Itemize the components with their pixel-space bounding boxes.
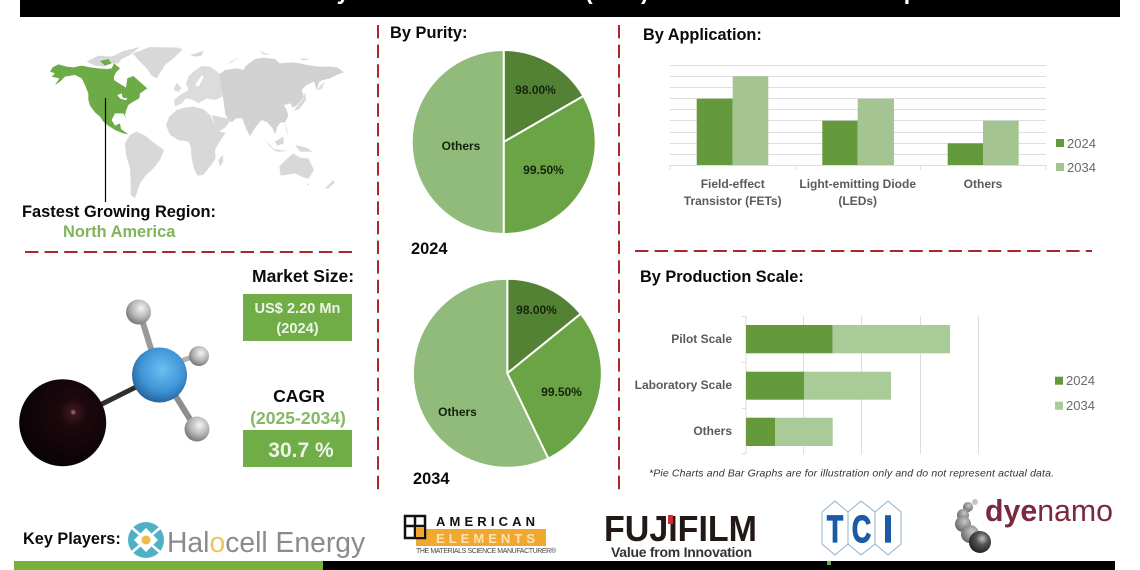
- market size value box: (2024): [276, 321, 319, 337]
- bar chart: production scale: 2034: [1066, 398, 1095, 413]
- heading: fastest growing region: Fastest Growing Region:: [22, 203, 216, 221]
- panel: by production scale: [635, 268, 1095, 480]
- logo: TCI: [822, 501, 901, 555]
- bar chart: production scale: Pilot Scale: [671, 332, 732, 346]
- bar chart: application: Field-effect: [701, 177, 765, 191]
- pie chart 2024: Others: [442, 139, 481, 153]
- panel dividers: [25, 25, 1092, 491]
- panel: molecule: [19, 300, 210, 466]
- pie chart 2034: 98.00%: [516, 303, 557, 317]
- logo: TCI: T: [827, 507, 843, 550]
- heading: CAGR: CAGR: [273, 386, 325, 406]
- icon: hydrogen atom right: [189, 346, 209, 366]
- footer bar: [14, 561, 1115, 570]
- logo: Fujifilm: Value from Innovation: [611, 544, 752, 560]
- icon: hydrogen atom bottom: [184, 416, 210, 442]
- pie chart 2034: 99.50%: [541, 385, 582, 399]
- panel: regional map: [22, 47, 344, 241]
- logo: American Elements: AMERICAN: [436, 514, 535, 529]
- bar chart: application: (LEDs): [838, 194, 877, 208]
- bar chart: production scale: 2024: [1066, 373, 1095, 388]
- pie chart 2024: 99.50%: [523, 163, 564, 177]
- logo: TCI: I: [883, 507, 893, 550]
- CAGR value box: 30.7 %: [268, 439, 334, 462]
- panel: key players: [23, 493, 1113, 560]
- CAGR value box: [243, 430, 352, 467]
- year label 2024: 2024: [411, 240, 448, 258]
- pie chart 2024: 98.00%: [515, 83, 556, 97]
- logo: Halocell Energy: Halocell Energy: [167, 526, 366, 558]
- logo: Fujifilm: FUJIFILM: [604, 508, 757, 549]
- logo: American Elements: [405, 514, 557, 555]
- heading: by production scale: By Production Scale:: [640, 268, 804, 286]
- bar chart: application: Light-emitting Diode: [799, 177, 916, 191]
- panel: market size: [243, 266, 354, 467]
- pie chart 2034: Others: [438, 405, 477, 419]
- heading: by application: By Application:: [643, 26, 762, 44]
- logo: American Elements: THE MATERIALS SCIENCE MANUFACTURER®: [416, 547, 557, 555]
- year label 2034: 2034: [413, 470, 450, 488]
- bar chart: application: Others: [964, 177, 1003, 191]
- icon: world map: [50, 47, 344, 198]
- bar chart: production scale: [635, 316, 1095, 454]
- logo: Dyenamo: [955, 493, 1113, 553]
- region name: North America: [63, 223, 176, 241]
- icon: bromine atom: [19, 379, 106, 466]
- title bar: [20, 0, 1120, 17]
- logo: Dyenamo: dyenamo: [985, 493, 1113, 528]
- bar chart: application: Transistor (FETs): [684, 194, 782, 208]
- icon: hydrogen atom top: [126, 300, 151, 324]
- footnote: *Pie Charts and Bar Graphs are for illustration only and do not represent actual data.: [649, 468, 1054, 480]
- bar chart: production scale: Laboratory Scale: [635, 378, 732, 392]
- pie chart 2034: [413, 279, 602, 468]
- panel: by purity: [390, 24, 602, 488]
- heading: by purity: By Purity:: [390, 24, 467, 42]
- bar chart: application: 2024: [1067, 136, 1096, 151]
- leader line: [104, 98, 106, 202]
- CAGR period: (2025-2034): [250, 408, 346, 428]
- panel: by application: [643, 26, 1096, 208]
- pie chart 2024: [412, 50, 596, 234]
- bar chart: application: 2034: [1067, 160, 1096, 175]
- market size value box: US$ 2.20 Mn: [255, 301, 341, 317]
- heading: key players: Key Players:: [23, 530, 121, 548]
- bar chart: application: [670, 66, 1096, 208]
- bar chart: production scale: Others: [693, 424, 732, 438]
- heading: market size: Market Size:: [252, 266, 354, 286]
- logo: American Elements: ELEMENTS: [436, 531, 535, 546]
- icon: nitrogen atom: [132, 348, 187, 402]
- logo: TCI: C: [852, 507, 871, 550]
- market size value box: [243, 294, 352, 341]
